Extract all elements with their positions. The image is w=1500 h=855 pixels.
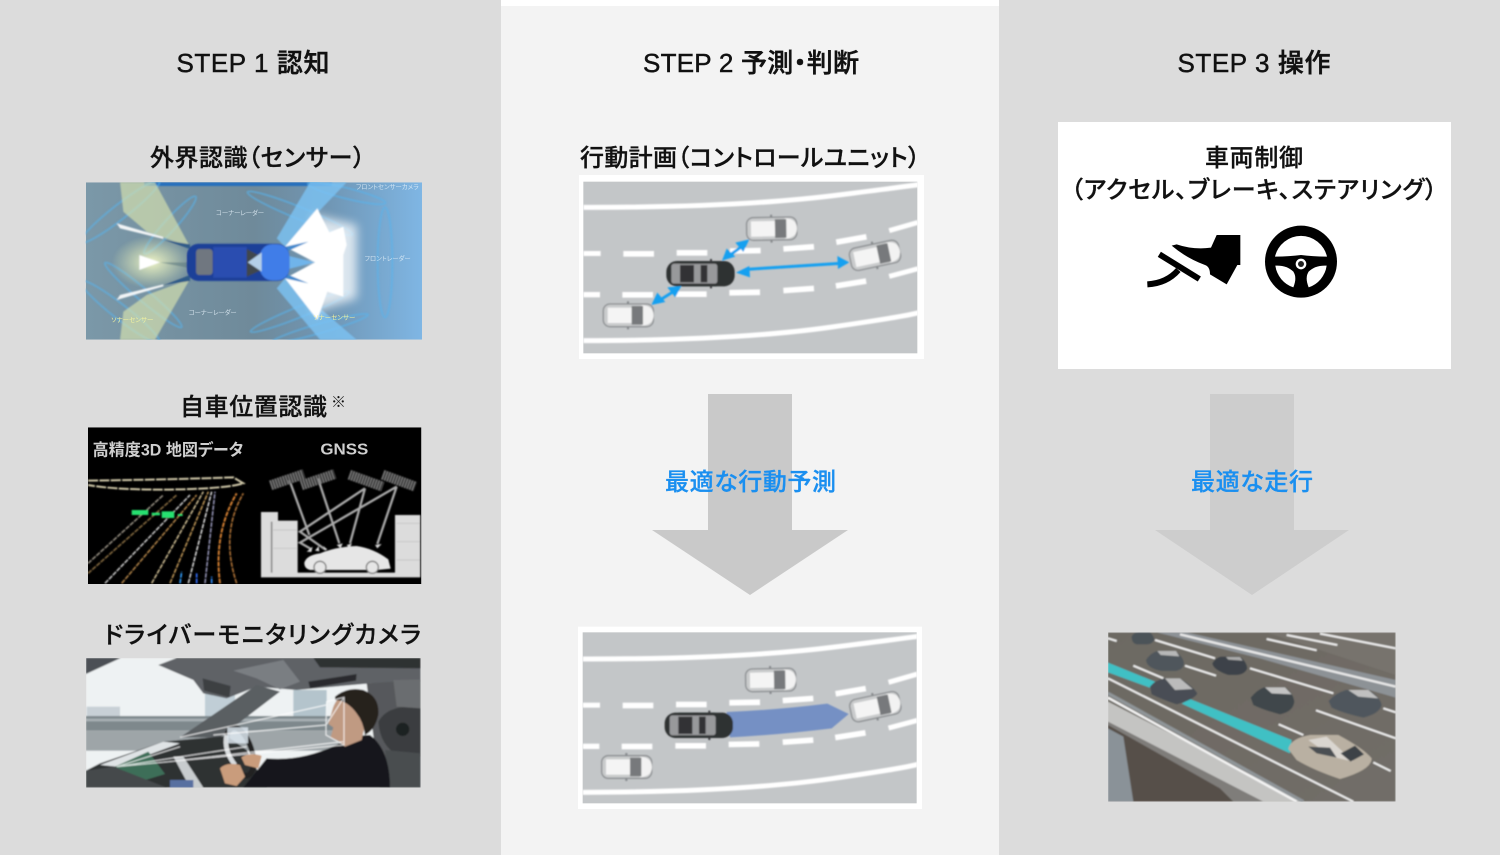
image: sensor coverage around car: フロントレーダー bbox=[364, 254, 411, 263]
arrow: to prediction bbox=[652, 394, 848, 595]
label: external sensors: 外界認識（センサー） bbox=[150, 145, 365, 172]
car bbox=[304, 546, 391, 570]
heading: step 2: STEP 2 予測・判断 bbox=[643, 48, 859, 78]
image: sensor coverage around car: コーナーレーダー bbox=[189, 307, 237, 316]
image: sensor coverage around car: フロントセンサーカメラ bbox=[356, 183, 419, 191]
label: driver monitoring camera: ドライバーモニタリングカメラ bbox=[104, 622, 421, 649]
panel: step 2 prediction and judgment bbox=[501, 0, 999, 855]
image: HD 3D map and GNSS: GNSS bbox=[320, 442, 368, 459]
icon: steering wheel bbox=[1265, 226, 1337, 298]
note mark: ※ bbox=[331, 394, 346, 411]
image: driver monitoring camera bbox=[86, 658, 421, 788]
image: sensor coverage around car: コーナーレーダー bbox=[216, 208, 264, 217]
callout: optimal action prediction: 最適な行動予測 bbox=[665, 469, 836, 496]
image: sensor coverage around car: ソナーセンサー bbox=[111, 316, 153, 324]
panel background bbox=[501, 6, 999, 855]
image: HD 3D map and GNSS: 高精度3D 地図データ bbox=[93, 439, 243, 459]
arrow: to driving bbox=[1155, 394, 1349, 595]
image: HD 3D map and GNSS bbox=[88, 427, 421, 584]
map lines bbox=[88, 477, 243, 583]
label: vehicle control: 車両制御 bbox=[1205, 145, 1303, 172]
diagram: distances to surrounding cars bbox=[579, 175, 927, 359]
image: sensor coverage around car: ソナーセンサー bbox=[313, 313, 355, 321]
card: vehicle control bbox=[1058, 122, 1451, 369]
image: cars driving on highway bbox=[1108, 632, 1396, 802]
icon: foot on pedal bbox=[1147, 235, 1240, 284]
image: sensor coverage around car bbox=[76, 175, 422, 348]
satellites bbox=[271, 474, 415, 487]
label: action plan: 行動計画（コントロールユニット） bbox=[580, 145, 920, 172]
label: actuators: （アクセル、ブレーキ、ステアリング） bbox=[1071, 176, 1437, 204]
cars bbox=[1132, 632, 1382, 779]
detection lines bbox=[117, 697, 344, 767]
callout: optimal driving: 最適な走行 bbox=[1191, 469, 1313, 496]
signal rays bbox=[289, 478, 397, 549]
top strip bbox=[501, 0, 999, 6]
heading: step 1: STEP 1 認知 bbox=[176, 48, 330, 78]
panel: step 3 operation bbox=[1058, 48, 1451, 802]
driver bbox=[243, 735, 390, 788]
buildings bbox=[261, 512, 420, 577]
label: self position: 自車位置認識 bbox=[180, 394, 327, 421]
diagram: predicted path bbox=[578, 627, 927, 809]
heading: step 3: STEP 3 操作 bbox=[1178, 48, 1330, 78]
panel: step 1 recognition bbox=[76, 48, 422, 788]
